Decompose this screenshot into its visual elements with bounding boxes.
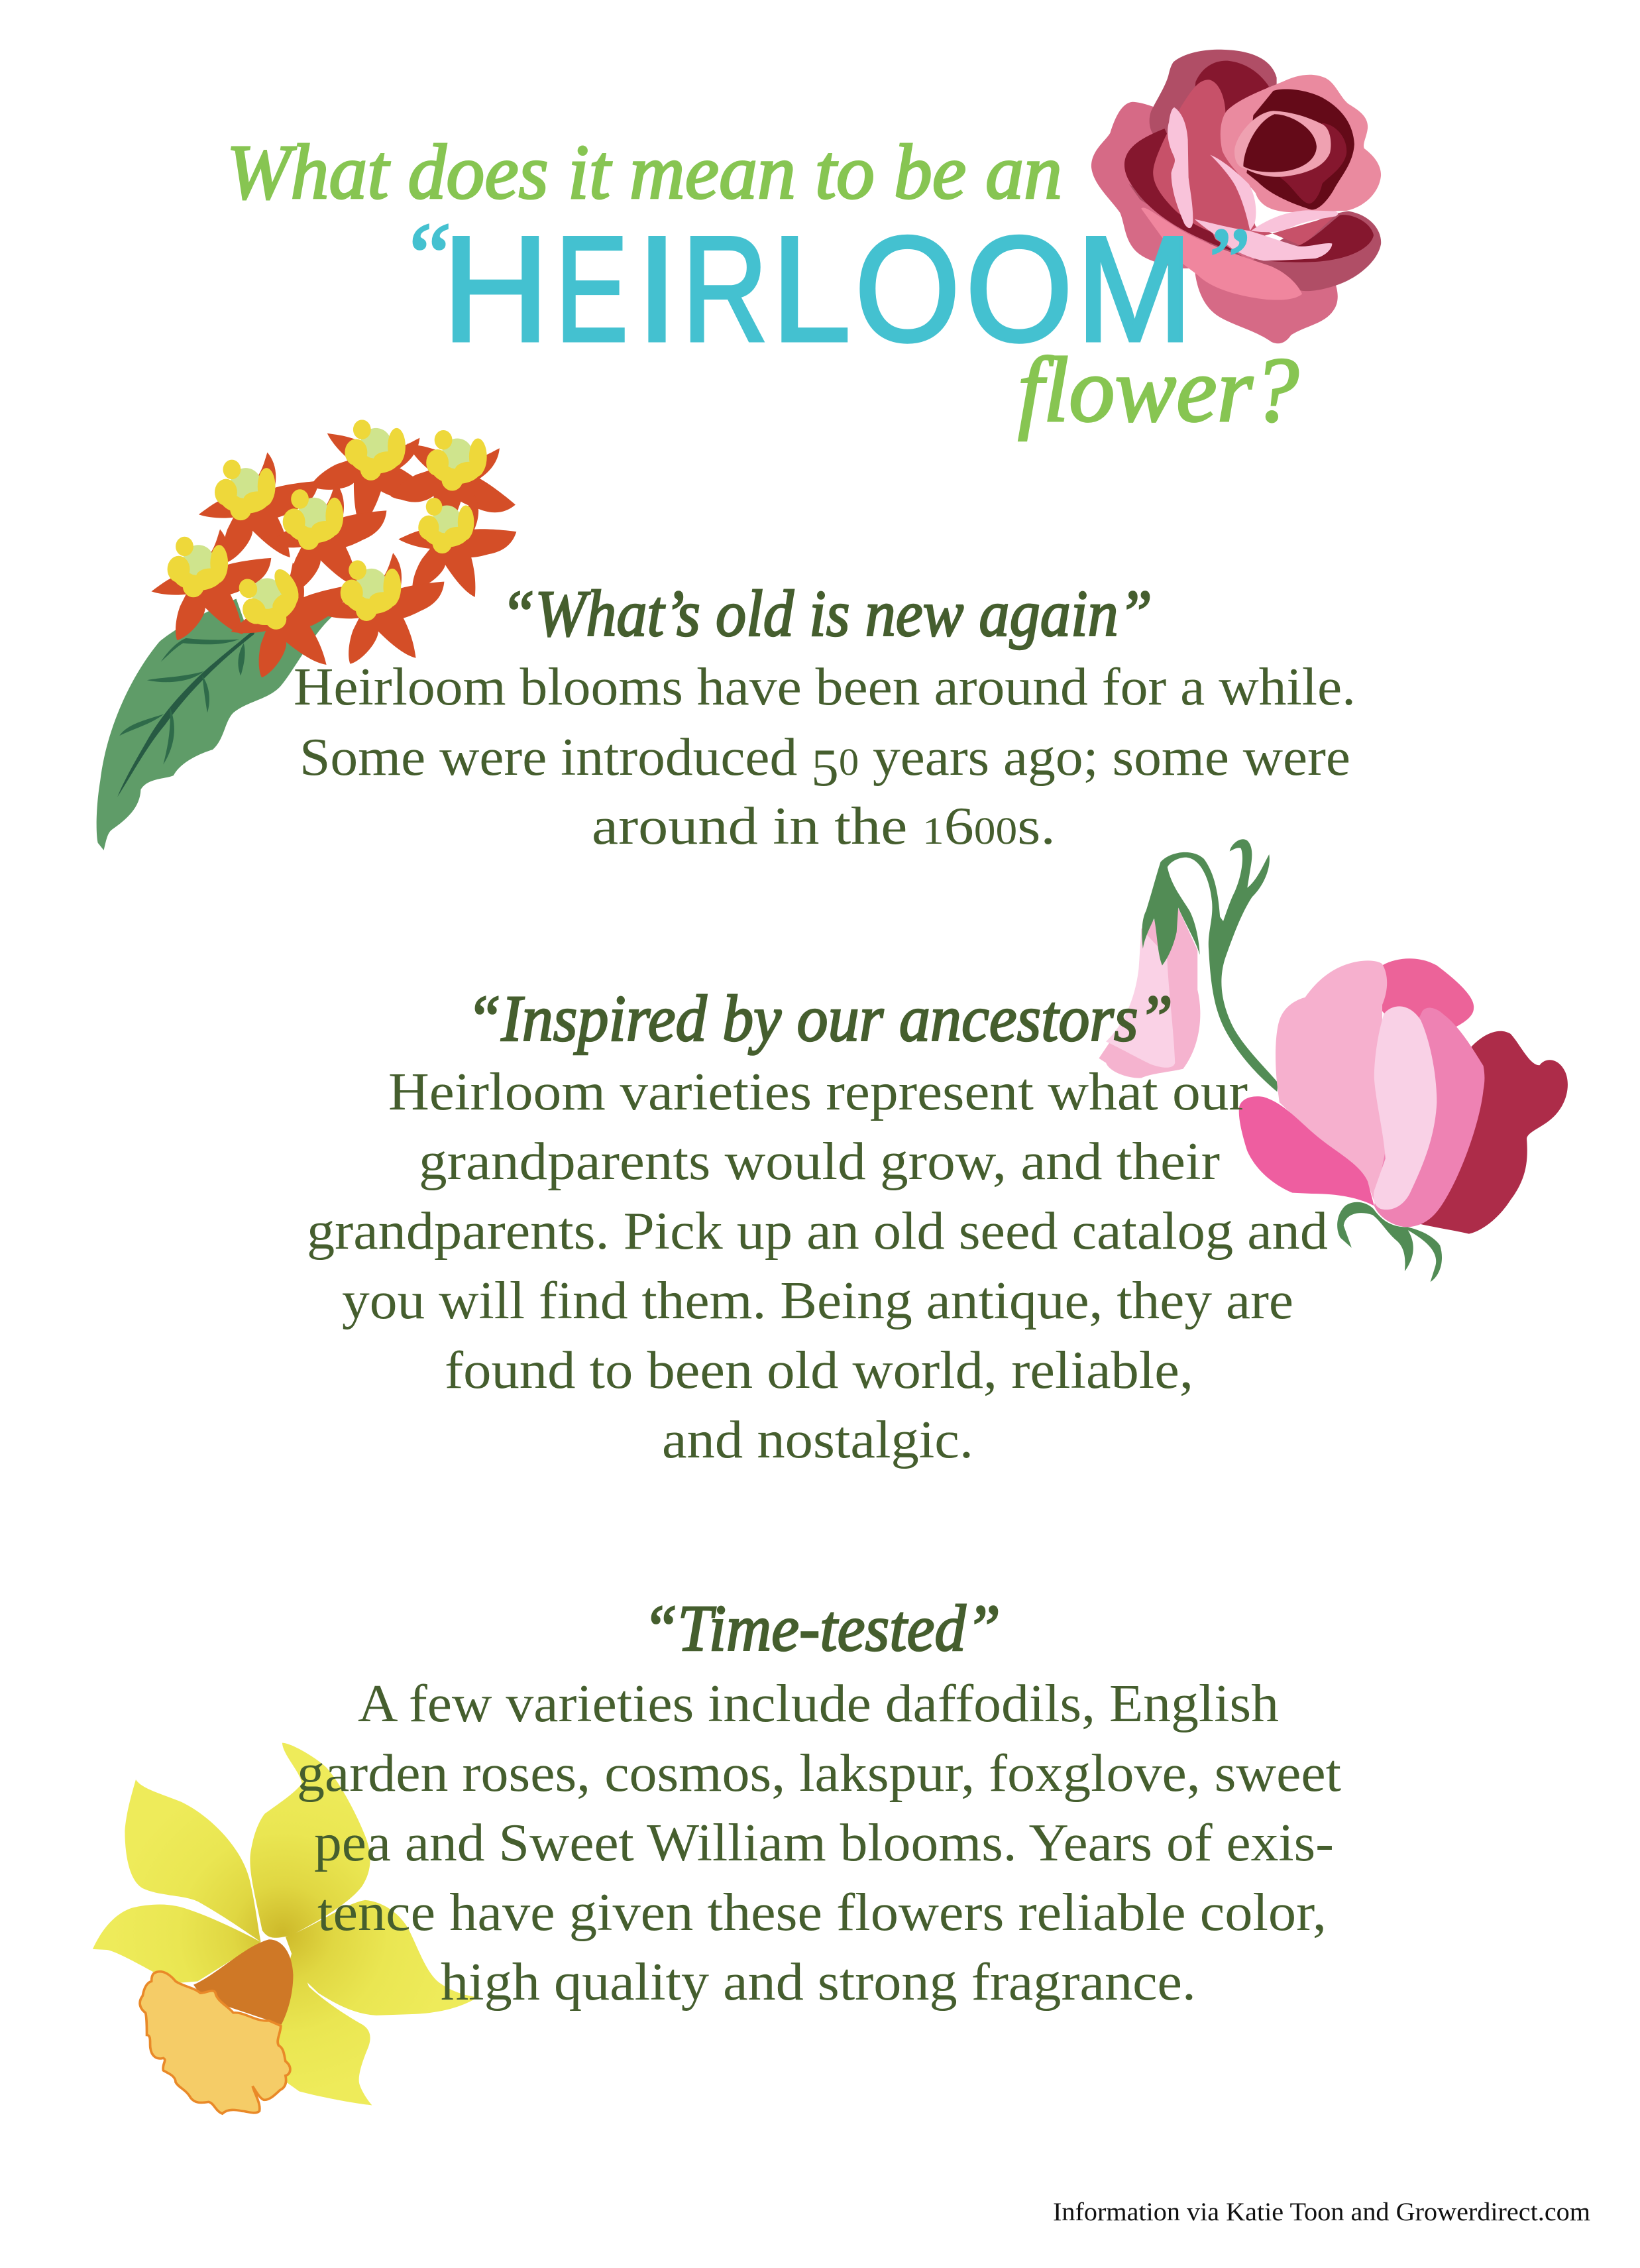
section 1 body: 5 bbox=[811, 739, 839, 797]
section 2 heading: “Inspired by our ancestors” bbox=[466, 982, 1173, 1055]
title keyword: H bbox=[442, 205, 549, 372]
section 2 body: you will find them. Being antique, they are bbox=[342, 1272, 1293, 1330]
section 1 body bbox=[294, 658, 1356, 856]
title keyword: R bbox=[682, 205, 768, 372]
section 1 body: years ago; some were bbox=[872, 728, 1330, 787]
icon: daffodil bbox=[93, 1743, 478, 2114]
section 1 body: around in the 1600s. bbox=[592, 797, 1056, 856]
section 3 body: tence have given these flowers reliable color, bbox=[317, 1884, 1327, 1942]
section 2 bbox=[307, 982, 1328, 1469]
title keyword: O bbox=[855, 205, 960, 372]
title keyword: ” bbox=[1199, 209, 1251, 312]
bloom bbox=[1239, 958, 1568, 1282]
icon: sweet pea bbox=[1099, 839, 1568, 1282]
section 2 body: found to been old world, reliable, bbox=[445, 1341, 1193, 1400]
section 3 heading: “Time-tested” bbox=[643, 1591, 1001, 1665]
leaf bbox=[97, 598, 334, 850]
section 3 body: A few varieties include daffodils, English bbox=[358, 1675, 1279, 1733]
section 2 body: Heirloom varieties represent what our bbox=[388, 1063, 1248, 1121]
section 2 body: and nostalgic. bbox=[662, 1411, 973, 1469]
section 1 body: Heirloom blooms have been around for a while. bbox=[294, 658, 1356, 716]
section 1 heading: “What’s old is new again” bbox=[501, 577, 1152, 650]
title line 1: What does it mean to be an bbox=[227, 129, 1062, 215]
title keyword: “ bbox=[400, 204, 453, 310]
stem and sepals bbox=[1142, 839, 1278, 1092]
section 3 body bbox=[297, 1675, 1341, 2012]
section 2 body: grandparents would grow, and their bbox=[419, 1133, 1220, 1191]
icon: milkweed flower cluster with leaf bbox=[97, 389, 535, 850]
title keyword: M bbox=[1076, 205, 1193, 372]
yellow flower centers bbox=[168, 420, 487, 641]
title keyword: E bbox=[555, 205, 628, 372]
section 3 bbox=[297, 1591, 1341, 2012]
petals bbox=[93, 1743, 478, 2105]
section 3 body: high quality and strong fragrance. bbox=[441, 1953, 1196, 2012]
title keyword: I bbox=[636, 205, 678, 372]
section 1 bbox=[294, 577, 1356, 856]
title keyword: L bbox=[771, 205, 851, 372]
orange star flowers bbox=[151, 389, 535, 680]
section 2 body bbox=[307, 1063, 1328, 1469]
icon: rose bbox=[1091, 50, 1381, 343]
title line 3: flower? bbox=[1018, 339, 1299, 441]
section 3 body: garden roses, cosmos, lakspur, foxglove, sweet bbox=[297, 1744, 1341, 1803]
frilled cup bbox=[140, 1972, 290, 2114]
title bbox=[227, 129, 1299, 441]
source credit: Information via Katie Toon and Growerdirect.com bbox=[1053, 2198, 1590, 2226]
title keyword: O bbox=[965, 205, 1073, 372]
section 1 body: 0 bbox=[839, 740, 859, 783]
section 2 body: grandparents. Pick up an old seed catalog and bbox=[307, 1202, 1328, 1261]
title keyword bbox=[400, 204, 1251, 372]
bud bbox=[1099, 905, 1200, 1078]
section 3 body: pea and Sweet William blooms. Years of exis- bbox=[314, 1814, 1334, 1872]
trumpet bbox=[193, 1939, 293, 2025]
section 1 body: Some were introduced bbox=[300, 728, 777, 787]
